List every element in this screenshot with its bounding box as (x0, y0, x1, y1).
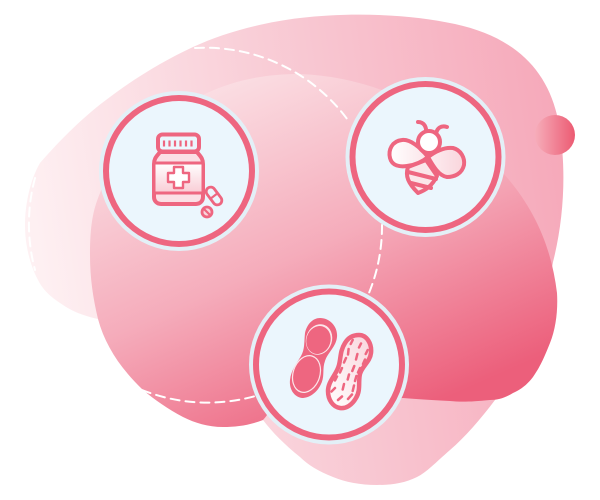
icon: bee (390, 122, 464, 193)
badge: bee (346, 77, 506, 237)
icon: pill (202, 207, 212, 217)
icon: peanut in shell (328, 335, 371, 408)
front blob (90, 74, 557, 427)
icon: medicine bottle (154, 134, 224, 217)
badge: medicine bottle (99, 91, 259, 251)
badge: peanuts (249, 284, 409, 444)
decorative dot (535, 115, 575, 155)
dashed orbit (29, 48, 382, 403)
icon: capsule (204, 185, 224, 207)
icon: shelled peanut (287, 318, 337, 398)
